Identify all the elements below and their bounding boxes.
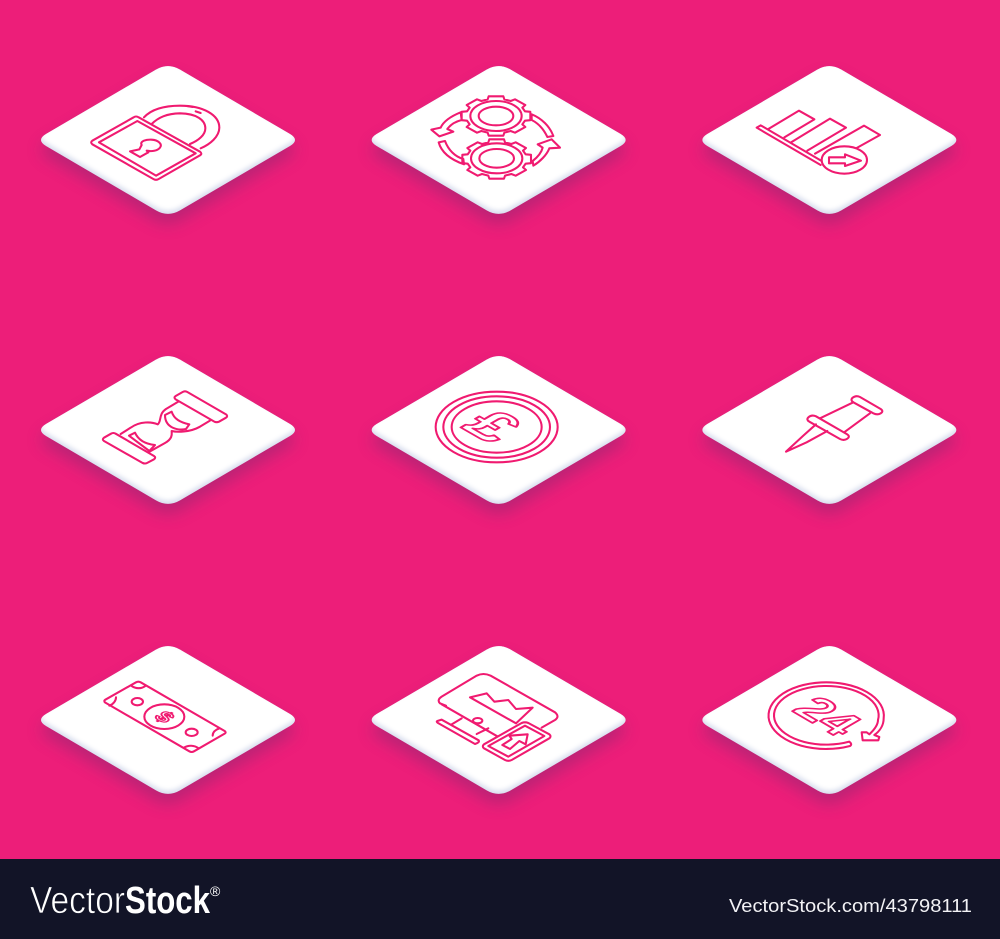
icon: pound coin: [436, 392, 558, 462]
icon: push pin: [786, 396, 882, 452]
logo: VectorStock: Stock: [125, 880, 211, 922]
footer bar: [0, 859, 1000, 939]
tile: dollar bill: [41, 643, 295, 804]
icon: dollar bill: $: [149, 708, 181, 726]
logo: VectorStock: [30, 880, 221, 922]
icon: dollar bill: [104, 682, 226, 752]
icon: gears with cycle arrows: [431, 96, 560, 179]
icon: hourglass: [103, 391, 227, 463]
icon: 24 hours arrow: 24: [783, 690, 873, 742]
icon: declining bars with arrow badge: [757, 111, 880, 174]
icon: pound coin: £: [449, 401, 536, 451]
tile: padlock: [41, 63, 295, 224]
icon: 24 hours arrow: [769, 682, 884, 749]
tile: gears cycle: [372, 63, 626, 224]
icon: monitor with tablet upload: [437, 674, 557, 761]
tile: pound coin: [372, 353, 626, 514]
image id text: VectorStock.com/43798111: [729, 895, 972, 916]
logo: VectorStock: ®: [210, 883, 221, 899]
tile: 24 hours: [702, 643, 956, 804]
tile: bar chart with arrow: [702, 63, 956, 224]
tile: monitor and tablet: [372, 643, 626, 804]
icon: padlock: [91, 106, 219, 180]
tile: push pin: [702, 353, 956, 514]
tile: hourglass: [41, 353, 295, 514]
logo: VectorStock: Vector: [30, 880, 125, 922]
